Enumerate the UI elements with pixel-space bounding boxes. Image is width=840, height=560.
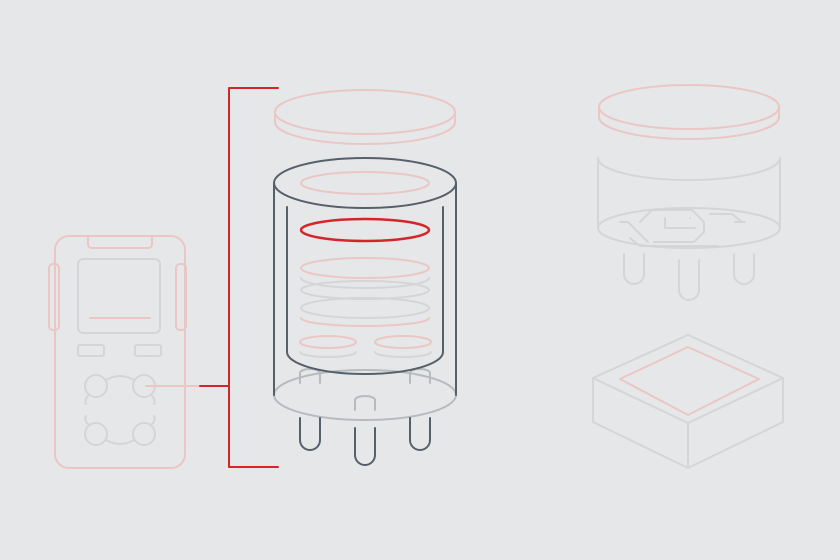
main sensor cylinder (274, 158, 456, 465)
chip (593, 335, 783, 468)
bracket (200, 88, 278, 467)
main sensor lid (275, 90, 455, 144)
device: gas detector (49, 236, 200, 468)
right sensor (598, 85, 780, 300)
